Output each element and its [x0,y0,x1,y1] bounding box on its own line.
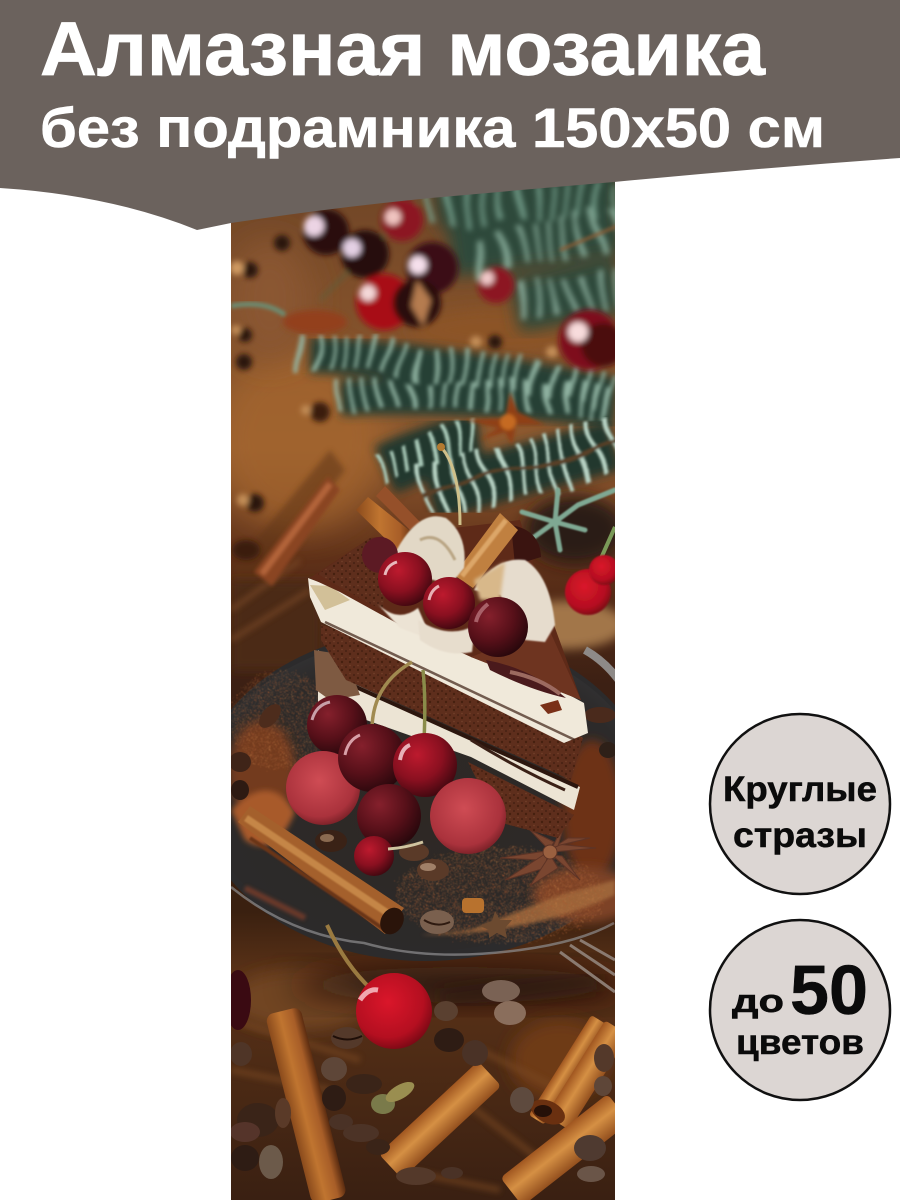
background cherries right of cake [565,527,619,615]
subtitle: без подрамника 150х50 см [40,96,825,159]
cinnamon on cake [356,486,518,588]
middle sponge [321,625,583,780]
badge: round rhinestones [710,714,890,894]
badge: up to 50 colours: до [732,983,784,1019]
fir sprig near cake [522,490,615,550]
title: Алмазная мозаика [40,7,766,92]
plate [231,646,615,961]
star anise on plate [500,830,596,886]
upper cream [308,578,588,743]
badge: round rhinestones: стразы [733,816,867,855]
big red cherry on table [327,925,432,1049]
cinnamon sticks on table [265,1007,630,1200]
blurred red sprig spice [283,310,347,334]
cocoa powder on plate [228,670,637,943]
branch: lower [378,435,615,495]
coffee beans and spice on plate [229,700,617,938]
fork at plate edge [560,940,615,992]
cherry stem above cake [442,448,460,525]
badge: round rhinestones: Круглые [723,770,877,809]
illustration: black forest cake photo [231,182,615,1200]
branch: middle [298,350,615,410]
fir branches [298,193,620,495]
branch: top right [430,193,620,305]
blurred cherries top [303,199,625,370]
cake top cherries and cream [362,516,555,657]
cake slice [308,520,588,838]
star anise blurred [465,392,545,445]
badge: up to 50 colours: цветов [736,1023,864,1062]
blurred cinnamon stick [254,476,340,586]
dark cherry at left edge [231,970,251,1030]
wood table background [215,170,630,1200]
top cocoa [310,520,581,700]
cinnamon stick on plate [238,814,404,934]
coffee beans on table [230,980,614,1185]
lower cream [318,650,580,810]
bottom sponge [468,762,574,838]
header banner [0,0,900,230]
badge: up to 50 colours [710,920,890,1100]
cherries and raspberries on plate [286,662,506,876]
blurred spice specks on table [230,235,558,560]
badge: up to 50 colours: 50 [790,951,868,1029]
